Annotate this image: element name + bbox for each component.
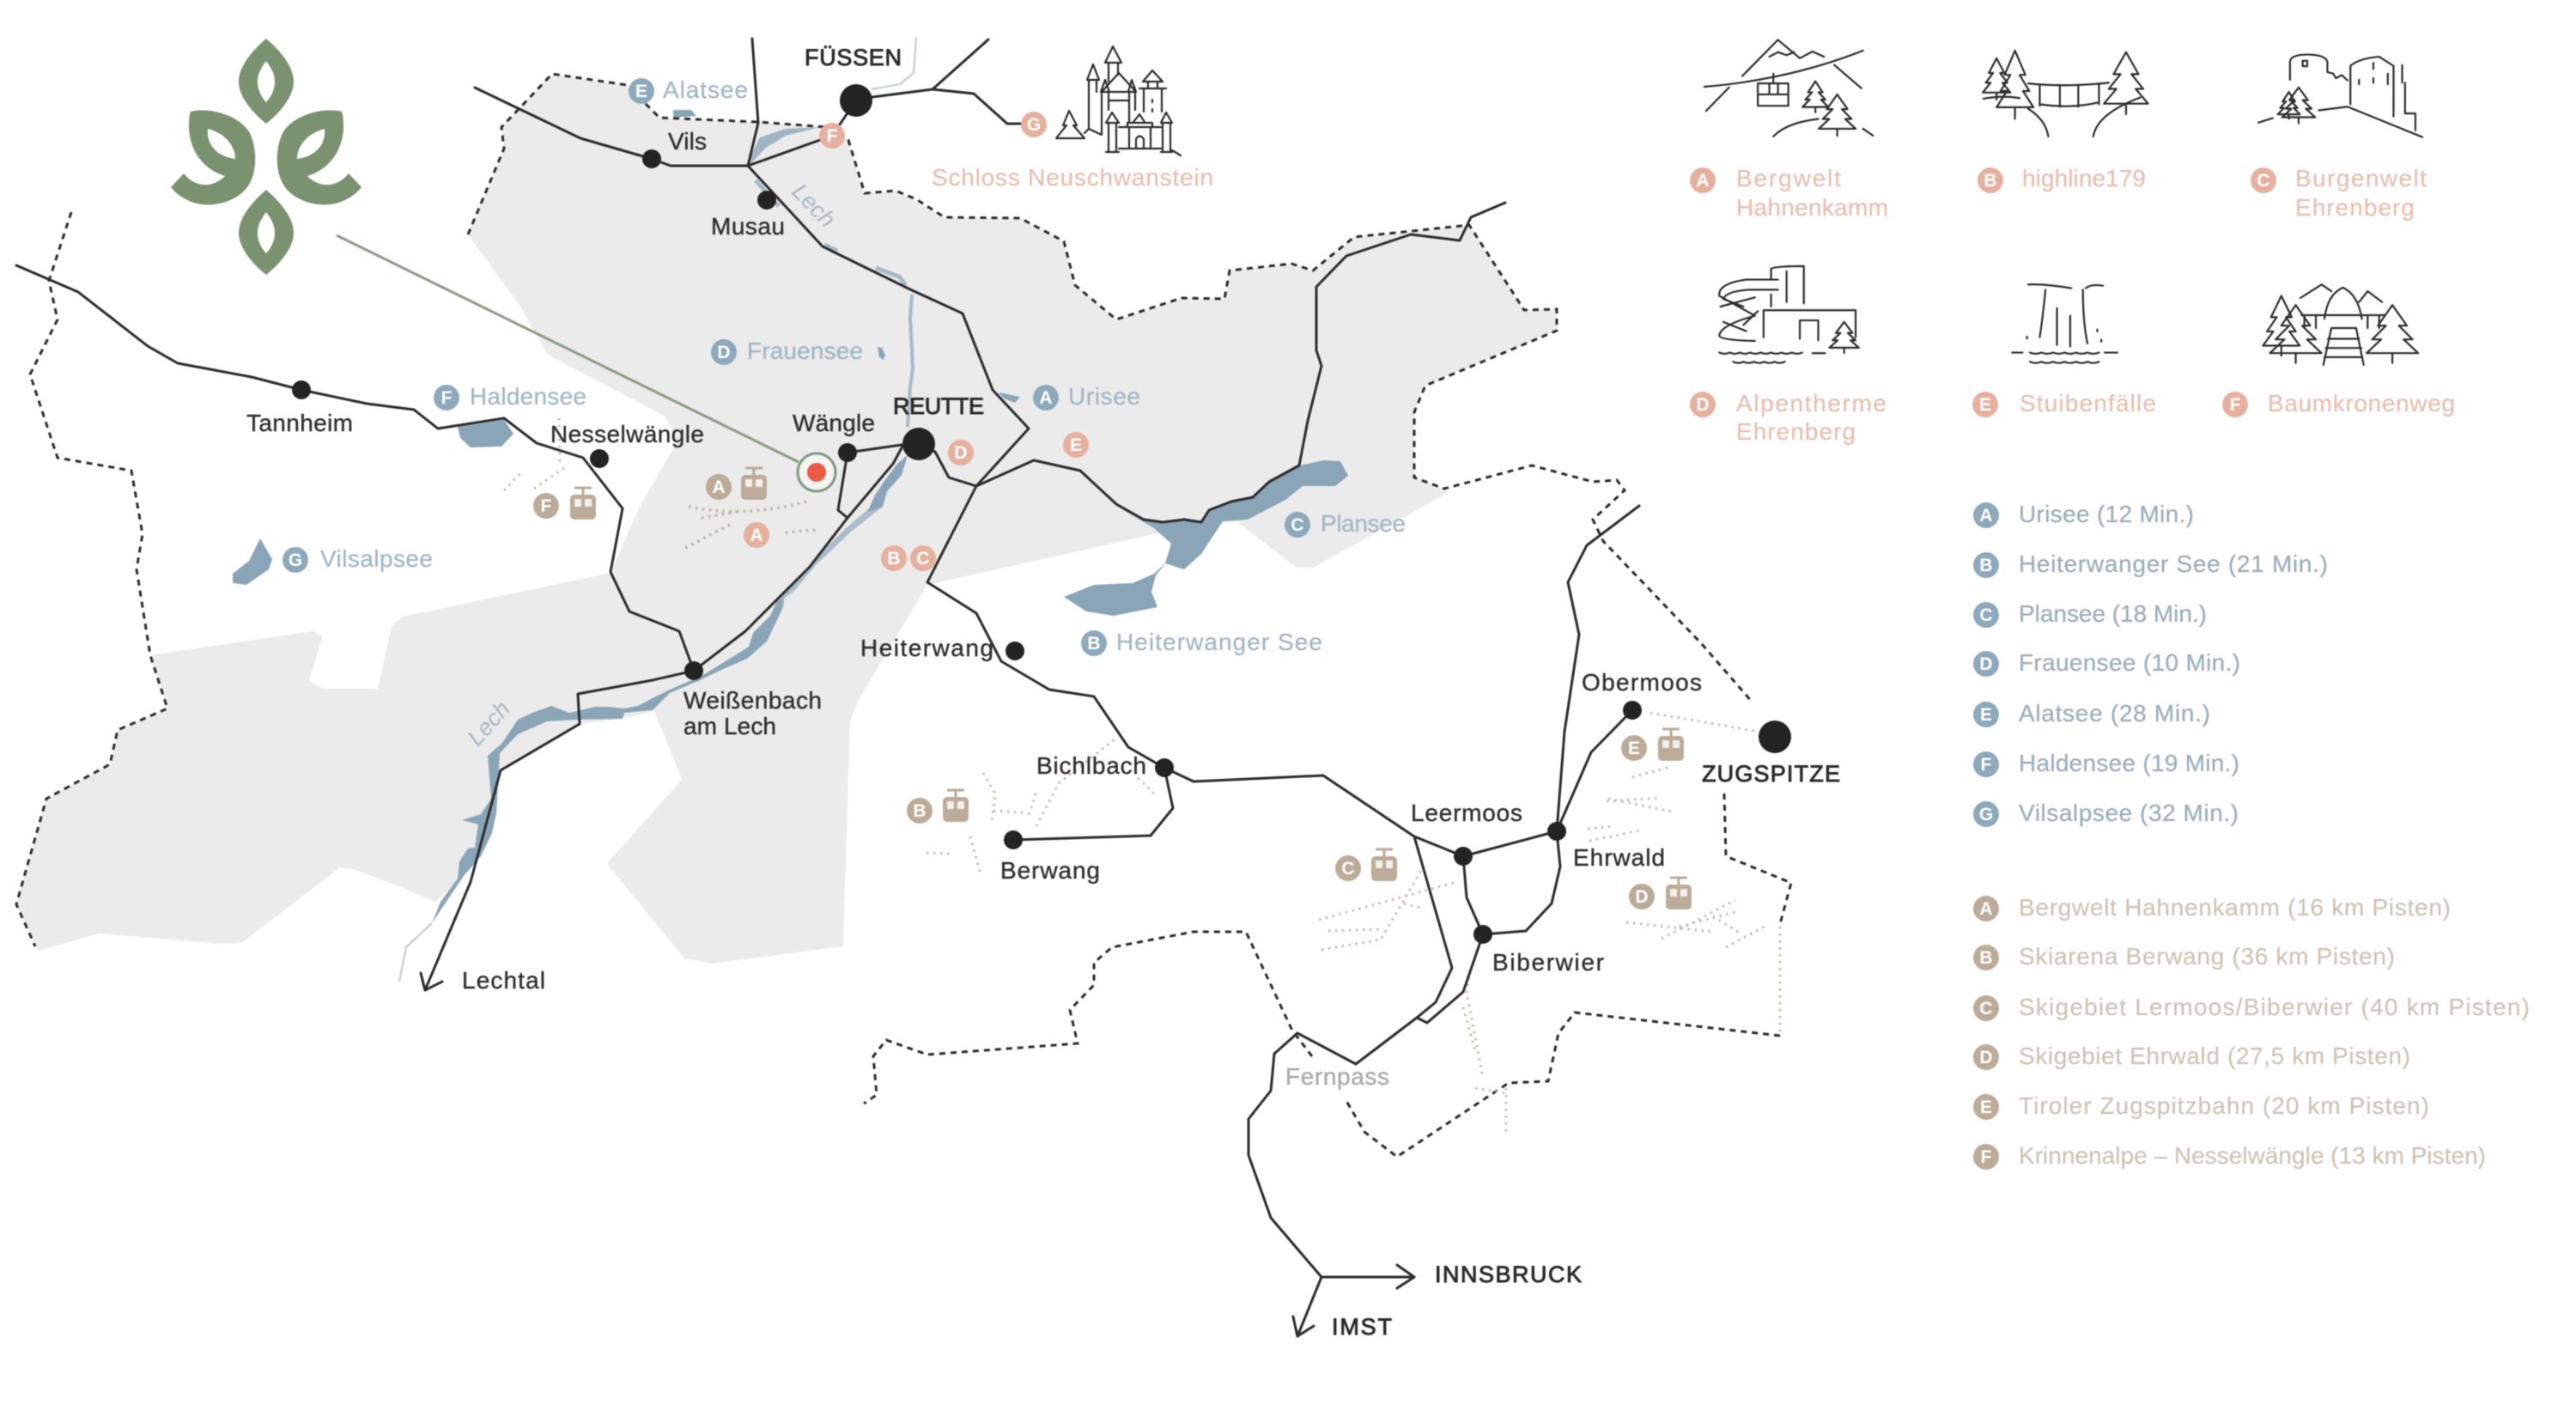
legend: attractions: [1690, 165, 2455, 445]
ski row F: F: [1981, 1147, 1992, 1167]
attraction markers on map: [744, 112, 1089, 571]
ski pistes: dotted lines: [504, 418, 1780, 1134]
attraction D: Ehrenberg: [1736, 418, 1856, 445]
attraction B: B: [1984, 171, 1997, 191]
lake: Alatsee: [673, 110, 696, 118]
lake row C: C: [1979, 605, 1993, 625]
lake: Urisee: [999, 392, 1020, 403]
marker: Heiterwanger See: Heiterwanger See: [1116, 629, 1322, 655]
label: Reutte: REUTTE: [893, 393, 984, 419]
lake row B: Heiterwanger See (21 Min.): [2019, 550, 2328, 577]
label: Heiterwang: Heiterwang: [860, 635, 993, 661]
attraction C: [2251, 165, 2427, 221]
legend: ski areas with piste lengths: [1973, 894, 2530, 1170]
label: Imst: IMST: [1332, 1314, 1392, 1340]
label: am Lech: am Lech: [683, 713, 776, 739]
ski marker C: C: [1341, 859, 1355, 879]
attraction E: E: [1979, 395, 1991, 415]
ski row A: Bergwelt Hahnenkamm (16 km Pisten): [2019, 894, 2451, 921]
logo bottom leaf: [239, 190, 294, 275]
marker: Haldensee: Haldensee: [470, 383, 586, 410]
icon: highline179: [1983, 51, 2148, 137]
ski marker F: F: [541, 496, 552, 516]
attraction B: highline179: [2022, 165, 2146, 192]
icon: Bergwelt Hahnenkamm: [1704, 40, 1873, 137]
lake row A: A: [1979, 506, 1993, 526]
ski row F: Krinnenalpe – Nesselwängle (13 km Pisten): [2019, 1142, 2486, 1169]
label: Füssen: FÜSSEN: [805, 45, 902, 70]
ski marker A: A: [712, 477, 726, 497]
location marker: [798, 453, 835, 491]
town dots: [292, 84, 1791, 944]
marker D attraction: D: [954, 443, 968, 463]
ski marker A: [706, 468, 767, 500]
label: Ehrwald: Ehrwald: [1573, 844, 1665, 871]
label: Zugspitze: ZUGSPITZE: [1702, 761, 1840, 787]
marker C attraction: [910, 545, 936, 571]
marker A attraction: [744, 522, 769, 548]
attraction E: Stuibenfälle: [2020, 390, 2156, 417]
marker: Urisee: Urisee: [1068, 383, 1140, 410]
border: dashed country boundaries: [16, 74, 1791, 1157]
arrow: Lechtal: [421, 973, 442, 990]
logo top leaf: [239, 39, 294, 124]
marker: Plansee: C: [1291, 515, 1304, 535]
ski marker E: [1621, 729, 1684, 761]
place labels: [246, 45, 1840, 1340]
marker: Heiterwanger See: B: [1087, 634, 1101, 654]
ski row C: C: [1979, 999, 1993, 1019]
arrow: Imst: [1293, 1317, 1314, 1336]
logo right leaf: [277, 110, 361, 204]
attraction C: Ehrenberg: [2295, 194, 2415, 221]
ski row B: B: [1979, 948, 1993, 968]
arrow: Innsbruck: [1397, 1265, 1414, 1288]
ski row E: Tiroler Zugspitzbahn (20 km Pisten): [2019, 1092, 2429, 1119]
roads: [16, 39, 1639, 1336]
label: Biberwier: Biberwier: [1492, 949, 1604, 976]
river: Lech: [399, 37, 916, 982]
ski row D: D: [1979, 1048, 1993, 1067]
label: Musau: Musau: [711, 213, 785, 240]
attraction A: Hahnenkamm: [1736, 194, 1888, 221]
attraction C: Burgenwelt: [2295, 165, 2427, 192]
label: Vils: Vils: [668, 128, 707, 155]
pointer line from logo to location: [337, 235, 799, 462]
label: Berwang: Berwang: [1000, 857, 1100, 884]
marker: Vilsalpsee: G: [289, 550, 302, 570]
marker F attraction: [819, 123, 845, 149]
label: Fernpass: Fernpass: [1285, 1063, 1389, 1090]
marker: Vilsalpsee: Vilsalpsee: [320, 545, 433, 572]
label: Lechtal: Lechtal: [462, 967, 545, 994]
lake row G: G: [1979, 805, 1993, 824]
lake row E: E: [1980, 705, 1992, 725]
attraction D: [1690, 390, 1886, 445]
marker D attraction: [948, 440, 974, 465]
label: Bichlbach: Bichlbach: [1036, 752, 1146, 779]
marker B attraction: [881, 545, 907, 571]
lake row D: D: [1979, 654, 1993, 674]
ski marker D: [1629, 878, 1692, 909]
lake row E: Alatsee (28 Min.): [2019, 700, 2210, 727]
marker E attraction: [1063, 432, 1089, 458]
ski marker B: [907, 790, 969, 824]
marker: Urisee: [1033, 383, 1140, 411]
logo left leaf: [171, 110, 255, 204]
lake row F: F: [1981, 755, 1992, 775]
attraction A: A: [1696, 171, 1710, 191]
ski marker E: E: [1628, 739, 1640, 758]
attraction A: Bergwelt: [1736, 165, 1841, 192]
marker: Alatsee: E: [635, 82, 647, 101]
lake row B: B: [1979, 556, 1993, 575]
marker E attraction: E: [1070, 435, 1082, 455]
attraction D: Alpentherme: [1736, 390, 1886, 417]
label: Nesselwängle: Nesselwängle: [550, 421, 704, 447]
lake row F: Haldensee (19 Min.): [2019, 750, 2239, 776]
attraction D: D: [1696, 395, 1710, 415]
icon: Stuibenfälle: [2012, 284, 2117, 363]
icon: Burgenwelt Ehrenberg: [2258, 55, 2422, 137]
marker F attraction: F: [827, 126, 838, 146]
marker: Frauensee: Frauensee: [747, 338, 863, 364]
marker C attraction: C: [916, 549, 930, 569]
lake: Vilsalpsee: [233, 538, 272, 585]
icon: Baumkronenweg: [2263, 284, 2418, 365]
marker B attraction: B: [887, 549, 901, 569]
attraction F: F: [2230, 395, 2241, 415]
lakes: [233, 110, 1348, 616]
ski marker F: [533, 488, 596, 520]
logo: four leaves: [171, 39, 361, 275]
marker: Plansee: [1285, 510, 1406, 538]
attraction B: [1978, 165, 2146, 193]
ski area markers with gondola icons: [533, 468, 1692, 909]
ski marker D: D: [1635, 887, 1649, 907]
ski marker C: [1335, 849, 1397, 881]
ski row A: A: [1979, 899, 1993, 919]
marker: Alatsee: Alatsee: [663, 76, 748, 103]
ski row D: Skigebiet Ehrwald (27,5 km Pisten): [2019, 1043, 2410, 1069]
legend: lakes with travel times: [1973, 501, 2328, 827]
lake: Heiterwanger See: [1064, 563, 1166, 616]
label: Obermoos: Obermoos: [1582, 669, 1702, 696]
marker A attraction: A: [750, 526, 763, 545]
attraction F: Baumkronenweg: [2268, 390, 2455, 417]
ski row C: Skigebiet Lermoos/Biberwier (40 km Pisten): [2019, 994, 2530, 1020]
marker: Alatsee: [629, 76, 748, 104]
label: Lech north: Lech: [787, 179, 841, 233]
label: Leermoos: Leermoos: [1411, 800, 1522, 826]
label: Lech south: Lech: [463, 696, 515, 751]
lake row G: Vilsalpsee (32 Min.): [2019, 800, 2239, 826]
icon: Alpentherme Ehrenberg: [1719, 266, 1859, 363]
attraction C: C: [2257, 171, 2270, 191]
label: Wängle: Wängle: [793, 410, 875, 436]
lake: Plansee: [1116, 460, 1348, 569]
lake markers on map: [283, 76, 1406, 656]
icon: Schloss Neuschwanstein: [1056, 46, 1181, 155]
lake row D: Frauensee (10 Min.): [2019, 649, 2240, 676]
label: Schloss Neuschwanstein: Schloss Neuschwanstein: [932, 164, 1213, 191]
lake row C: Plansee (18 Min.): [2019, 600, 2207, 627]
marker: Plansee: Plansee: [1321, 510, 1406, 537]
marker: Haldensee: F: [441, 388, 453, 408]
ski marker B: B: [913, 801, 927, 821]
lake row A: Urisee (12 Min.): [2019, 501, 2194, 527]
marker G attraction: [1021, 112, 1047, 137]
attraction A: [1690, 165, 1888, 221]
lake: Frauensee: [878, 347, 885, 360]
label: Tannheim: Tannheim: [246, 410, 353, 436]
ski row E: E: [1980, 1098, 1992, 1117]
lake: Haldensee: [458, 420, 513, 447]
ski row B: Skiarena Berwang (36 km Pisten): [2019, 943, 2395, 970]
label: Innsbruck: INNSBRUCK: [1435, 1262, 1582, 1287]
marker G attraction: G: [1027, 115, 1041, 135]
marker: Frauensee: D: [717, 343, 731, 362]
label: Weißenbach: Weißenbach: [683, 687, 822, 714]
marker: Urisee: A: [1039, 388, 1053, 408]
panel: shaded region of the map: [16, 74, 1557, 964]
